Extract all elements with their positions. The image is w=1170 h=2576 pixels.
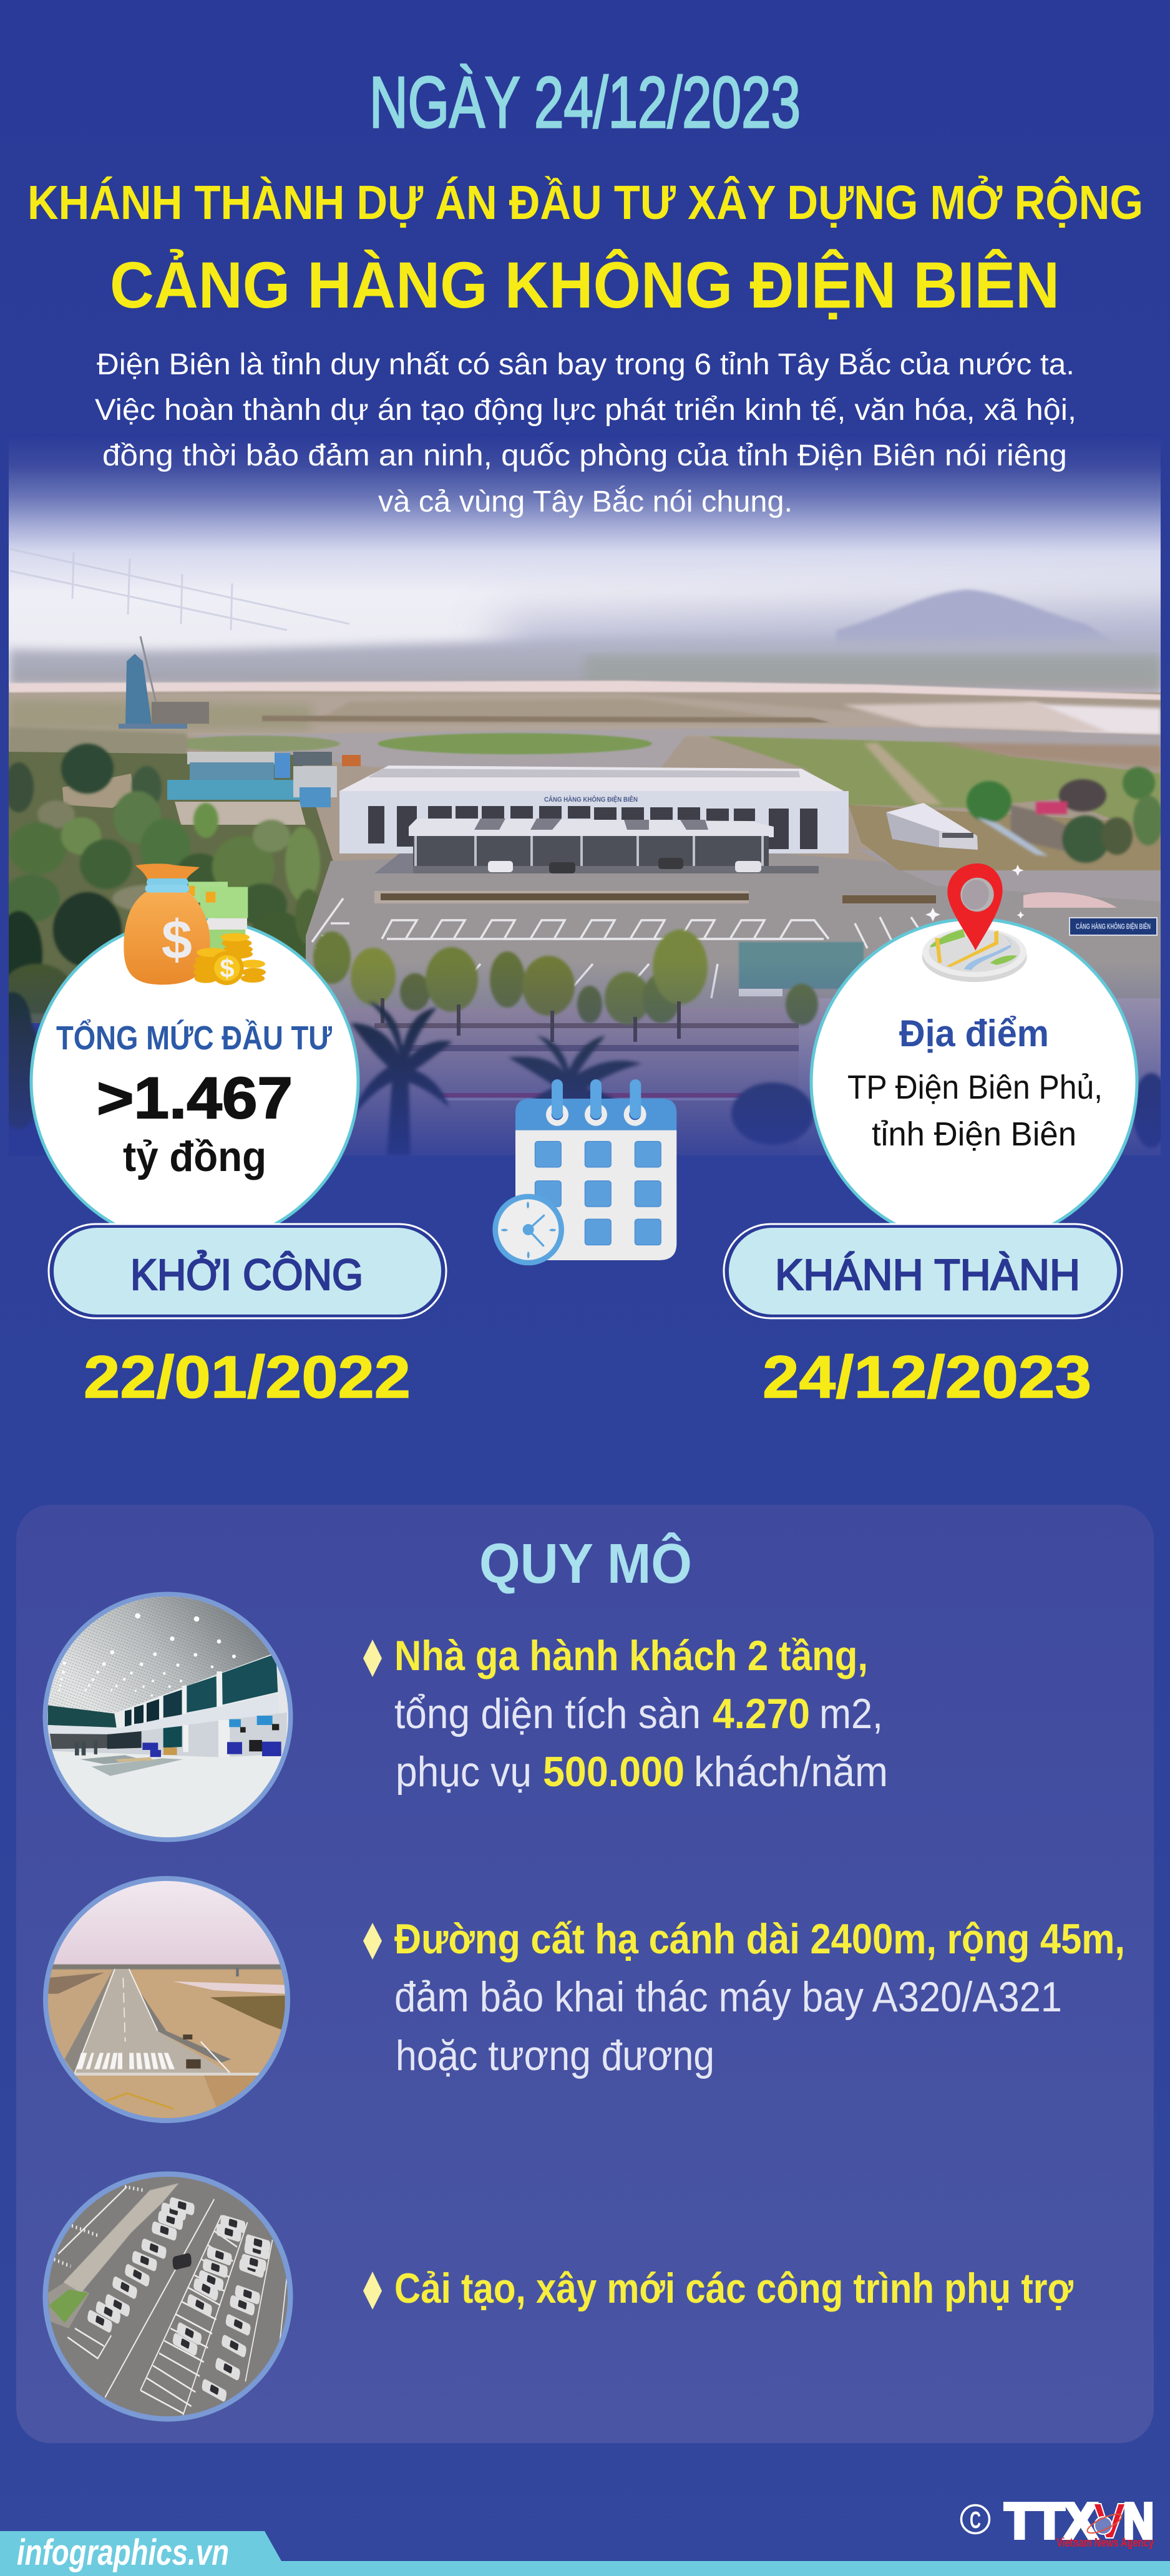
bullet	[363, 2272, 382, 2310]
distant hills	[9, 636, 1161, 693]
logo: TTXVN: V	[1093, 2493, 1126, 2549]
tan ground near right grass	[936, 742, 1161, 767]
text: terminal: Nhà ga hành khách 2 tầng,	[394, 1632, 868, 1679]
location label: Địa điểm	[899, 1013, 1049, 1054]
text: terminal: m2,	[819, 1690, 883, 1738]
icon: money bag: $	[162, 909, 192, 971]
white shed	[886, 803, 978, 850]
sparkles	[925, 865, 1025, 921]
sign board	[1070, 918, 1157, 935]
logo: TTXVN: TTX	[1005, 2493, 1097, 2549]
photo: terminal interior	[37, 1588, 300, 1850]
text: terminal: 500.000	[543, 1748, 685, 1796]
parking lines	[58, 2187, 286, 2415]
sky	[9, 434, 1161, 696]
taxiway	[187, 727, 1161, 767]
start pill: KHỞI CÔNG	[130, 1250, 363, 1299]
intro paragraph	[95, 348, 1076, 518]
check-in counters	[142, 1742, 281, 1757]
right ground	[849, 805, 1161, 870]
right house and trees	[967, 767, 1163, 863]
street and purple overlay area	[306, 1008, 799, 1155]
floor panels	[80, 1755, 145, 1764]
tree row	[313, 930, 818, 1025]
palms	[0, 1001, 1170, 1155]
billboard	[739, 942, 864, 996]
beige building	[62, 774, 134, 808]
left trees	[9, 742, 321, 1027]
terminal building: CẢNG HÀNG KHÔNG ĐIỆN BIÊN	[544, 795, 638, 804]
control tower	[119, 636, 209, 729]
icon: map pin	[922, 863, 1027, 982]
blue building	[167, 752, 361, 807]
fields	[9, 686, 1161, 873]
distant mountain	[836, 588, 1100, 639]
start pill	[49, 1224, 446, 1318]
copyright symbol: C	[970, 2507, 981, 2534]
glass bands	[48, 1654, 279, 1728]
icon: money bag	[124, 863, 266, 985]
text: terminal: tổng diện tích sàn	[394, 1690, 701, 1738]
text: terminal: 4.270	[713, 1690, 810, 1738]
investment unit: tỷ đồng	[123, 1133, 266, 1180]
text: terminal	[363, 1632, 888, 1796]
runway shoulder	[64, 1969, 114, 2073]
investment value: >1.467	[97, 1065, 293, 1130]
intro paragraph: Điện Biên là tỉnh duy nhất có sân bay trong 6 tỉnh Tây Bắc của nước ta.	[97, 348, 1075, 381]
completion date: 24/12/2023	[763, 1344, 1091, 1411]
cars at terminal	[488, 861, 513, 872]
completion pill	[724, 1224, 1122, 1318]
location circle: tỉnh Điện Biên	[872, 1115, 1076, 1153]
terminal roof	[339, 766, 849, 794]
runway surface	[74, 1969, 231, 2073]
terminal canopy	[409, 819, 774, 837]
website label: infographics.vn	[17, 2532, 229, 2573]
right grass	[709, 736, 1161, 822]
globe	[1094, 2517, 1112, 2534]
logo: TTXVN: N	[1123, 2493, 1154, 2549]
terminal wall	[339, 791, 849, 853]
title date: NGÀY 24/12/2023	[369, 62, 801, 143]
apron and road	[306, 853, 1161, 1008]
panel heading: QUY MÔ	[479, 1532, 692, 1595]
left ground	[9, 727, 187, 755]
investment label: TỔNG MỨC ĐẦU TƯ	[56, 1019, 332, 1057]
terminal glass	[413, 836, 769, 866]
logo: TTXVN	[961, 2493, 1154, 2550]
location text: TP Điện Biên Phủ,	[847, 1069, 1103, 1106]
text: runway: đảm bảo khai thác máy bay A320/A321	[394, 1973, 1062, 2021]
airport aerial photo	[0, 434, 1170, 1155]
copyright symbol	[961, 2506, 990, 2534]
white wall band	[48, 1693, 287, 1734]
completion pill: KHÁNH THÀNH	[775, 1250, 1080, 1299]
pale strip	[9, 681, 1161, 700]
bullet	[363, 1923, 382, 1960]
icon: calendar with clock	[492, 1079, 676, 1265]
terminal building	[339, 766, 849, 873]
parking chevrons	[312, 898, 924, 998]
people	[75, 1741, 97, 1756]
threshold stripes	[76, 2053, 175, 2069]
text: auxiliary works: Cải tạo, xây mới các công trình phụ trợ	[394, 2265, 1074, 2312]
photo: car park	[37, 2169, 300, 2424]
start date: 22/01/2022	[84, 1344, 411, 1411]
headline line 2: CẢNG HÀNG KHÔNG ĐIỆN BIÊN	[110, 248, 1060, 322]
cars	[87, 2197, 271, 2403]
footer bar	[0, 2531, 1170, 2576]
text: runway: hoặc tương đương	[396, 2032, 714, 2079]
power lines	[10, 549, 349, 630]
map details	[930, 929, 965, 947]
tree strip	[64, 2183, 179, 2293]
intro paragraph: và cả vùng Tây Bắc nói chung.	[378, 485, 792, 518]
text: runway	[363, 1915, 1125, 2079]
gradient overlay	[9, 961, 1161, 1155]
icon: money bag: $	[220, 954, 235, 983]
grass ovals	[172, 736, 340, 752]
panel: scale	[16, 1505, 1154, 2443]
text: terminal: phục vụ	[396, 1748, 532, 1796]
investment circle	[31, 918, 358, 1245]
intro paragraph: đồng thời bảo đảm an ninh, quốc phòng của tỉnh Điện Biên nói riêng	[102, 439, 1067, 472]
photo: runway	[37, 1872, 300, 2124]
terminal windows	[368, 806, 817, 849]
planter strips	[374, 891, 749, 903]
text: terminal: khách/năm	[694, 1748, 888, 1796]
bullet	[363, 1640, 382, 1677]
lower level	[48, 1713, 287, 1757]
location circle	[811, 919, 1137, 1245]
intro paragraph: Việc hoàn thành dự án tạo động lực phát triển kinh tế, văn hóa, xã hội,	[95, 394, 1076, 427]
